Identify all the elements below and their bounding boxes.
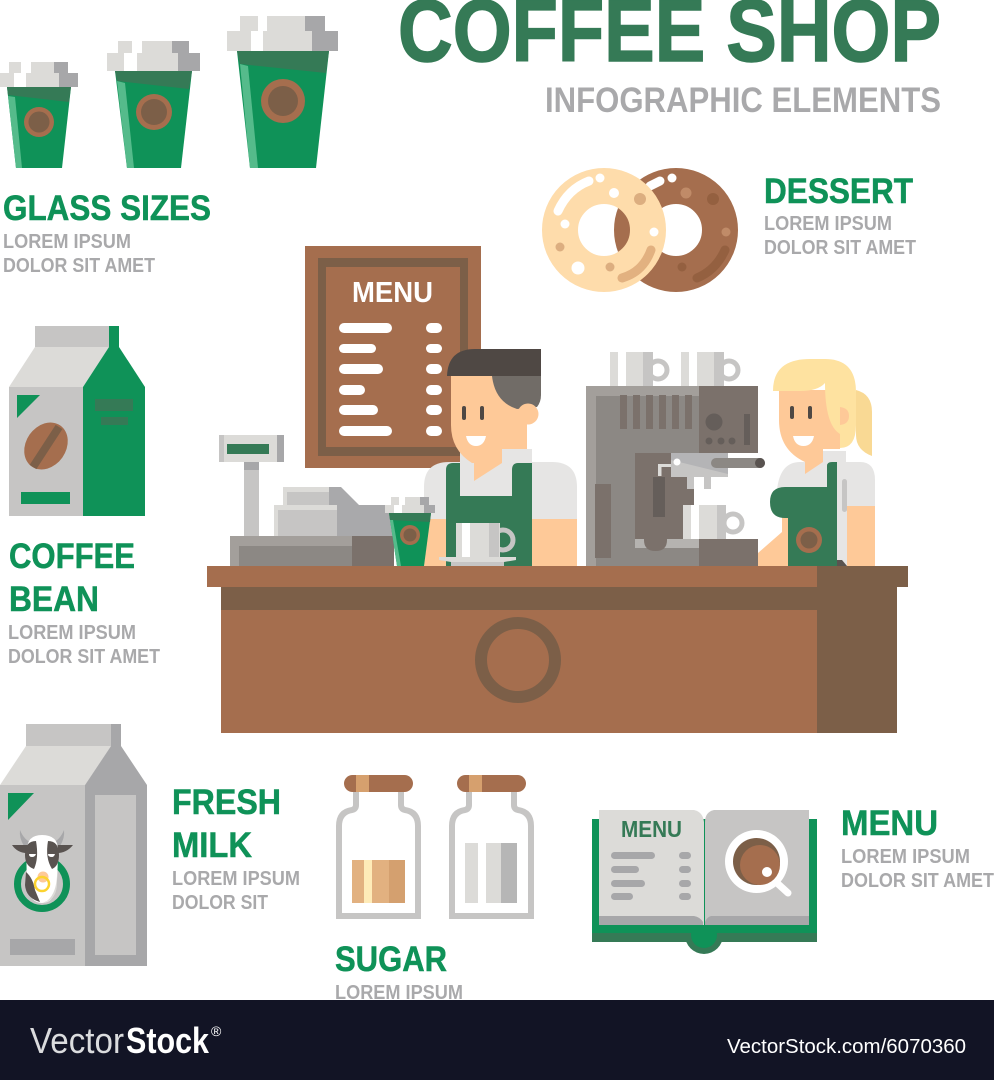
footer bar: VectorStock.com/6070360 xyxy=(727,1036,966,1058)
icon: open menu book xyxy=(592,810,817,954)
footer bar: ® xyxy=(211,1023,222,1039)
icon: cups on machine xyxy=(610,352,738,386)
panel: menu board: MENU xyxy=(352,277,433,309)
text block: glass sizes: LOREM IPSUM xyxy=(3,231,131,253)
text block: dessert: LOREM IPSUM xyxy=(764,213,892,235)
icon: donuts xyxy=(556,174,730,278)
text block: fresh milk: FRESH xyxy=(172,783,281,822)
text block: menu xyxy=(841,804,994,892)
text block: dessert: DOLOR SIT AMET xyxy=(764,237,916,259)
text block: sugar: LOREM IPSUM xyxy=(335,982,463,1004)
text block: fresh milk xyxy=(172,783,300,914)
figure: male barista xyxy=(424,349,577,566)
figure: female barista xyxy=(758,359,875,566)
icon: coffee mug with saucer xyxy=(439,523,516,566)
icon: takeaway cup on counter xyxy=(385,497,435,566)
icon: brown sugar jar xyxy=(339,775,418,916)
text block: sugar: SUGAR xyxy=(335,940,447,979)
text block: coffee bean: DOLOR SIT AMET xyxy=(8,646,160,668)
icon: open menu book: MENU xyxy=(621,816,682,842)
icon: coffee bean pack xyxy=(9,326,145,516)
text block: dessert xyxy=(764,172,916,259)
text block: fresh milk: DOLOR SIT xyxy=(172,892,268,914)
text block: fresh milk: MILK xyxy=(172,826,252,865)
footer bar: Vector xyxy=(30,1020,124,1061)
icon: large cup xyxy=(227,16,338,168)
icon: cash register xyxy=(219,435,394,566)
footer bar: Stock xyxy=(126,1020,210,1061)
text block: coffee bean xyxy=(8,537,160,668)
text block: glass sizes: DOLOR SIT AMET xyxy=(3,255,155,277)
icon: medium cup xyxy=(107,41,200,168)
text block: coffee bean: COFFEE xyxy=(9,537,135,576)
text block: menu: LOREM IPSUM xyxy=(841,846,970,868)
panel: counter xyxy=(207,566,908,733)
icon: cow logo xyxy=(12,830,73,908)
text block: glass sizes xyxy=(3,189,211,277)
subtitle: INFOGRAPHIC ELEMENTS xyxy=(545,81,941,120)
text block: coffee bean: LOREM IPSUM xyxy=(8,622,136,644)
panel: menu board xyxy=(305,246,481,468)
text block: dessert: DESSERT xyxy=(764,172,913,211)
text block: glass sizes: GLASS SIZES xyxy=(3,189,211,228)
text block: coffee bean: BEAN xyxy=(9,580,99,619)
icon: espresso machine xyxy=(586,386,765,566)
text block: fresh milk: LOREM IPSUM xyxy=(172,868,300,890)
text block: sugar xyxy=(335,940,463,1004)
icon: small cup xyxy=(0,62,78,168)
icon: milk carton xyxy=(0,724,147,966)
footer bar xyxy=(0,1000,994,1080)
text block: menu: MENU xyxy=(841,804,938,843)
icon: white sugar jar xyxy=(452,775,531,916)
